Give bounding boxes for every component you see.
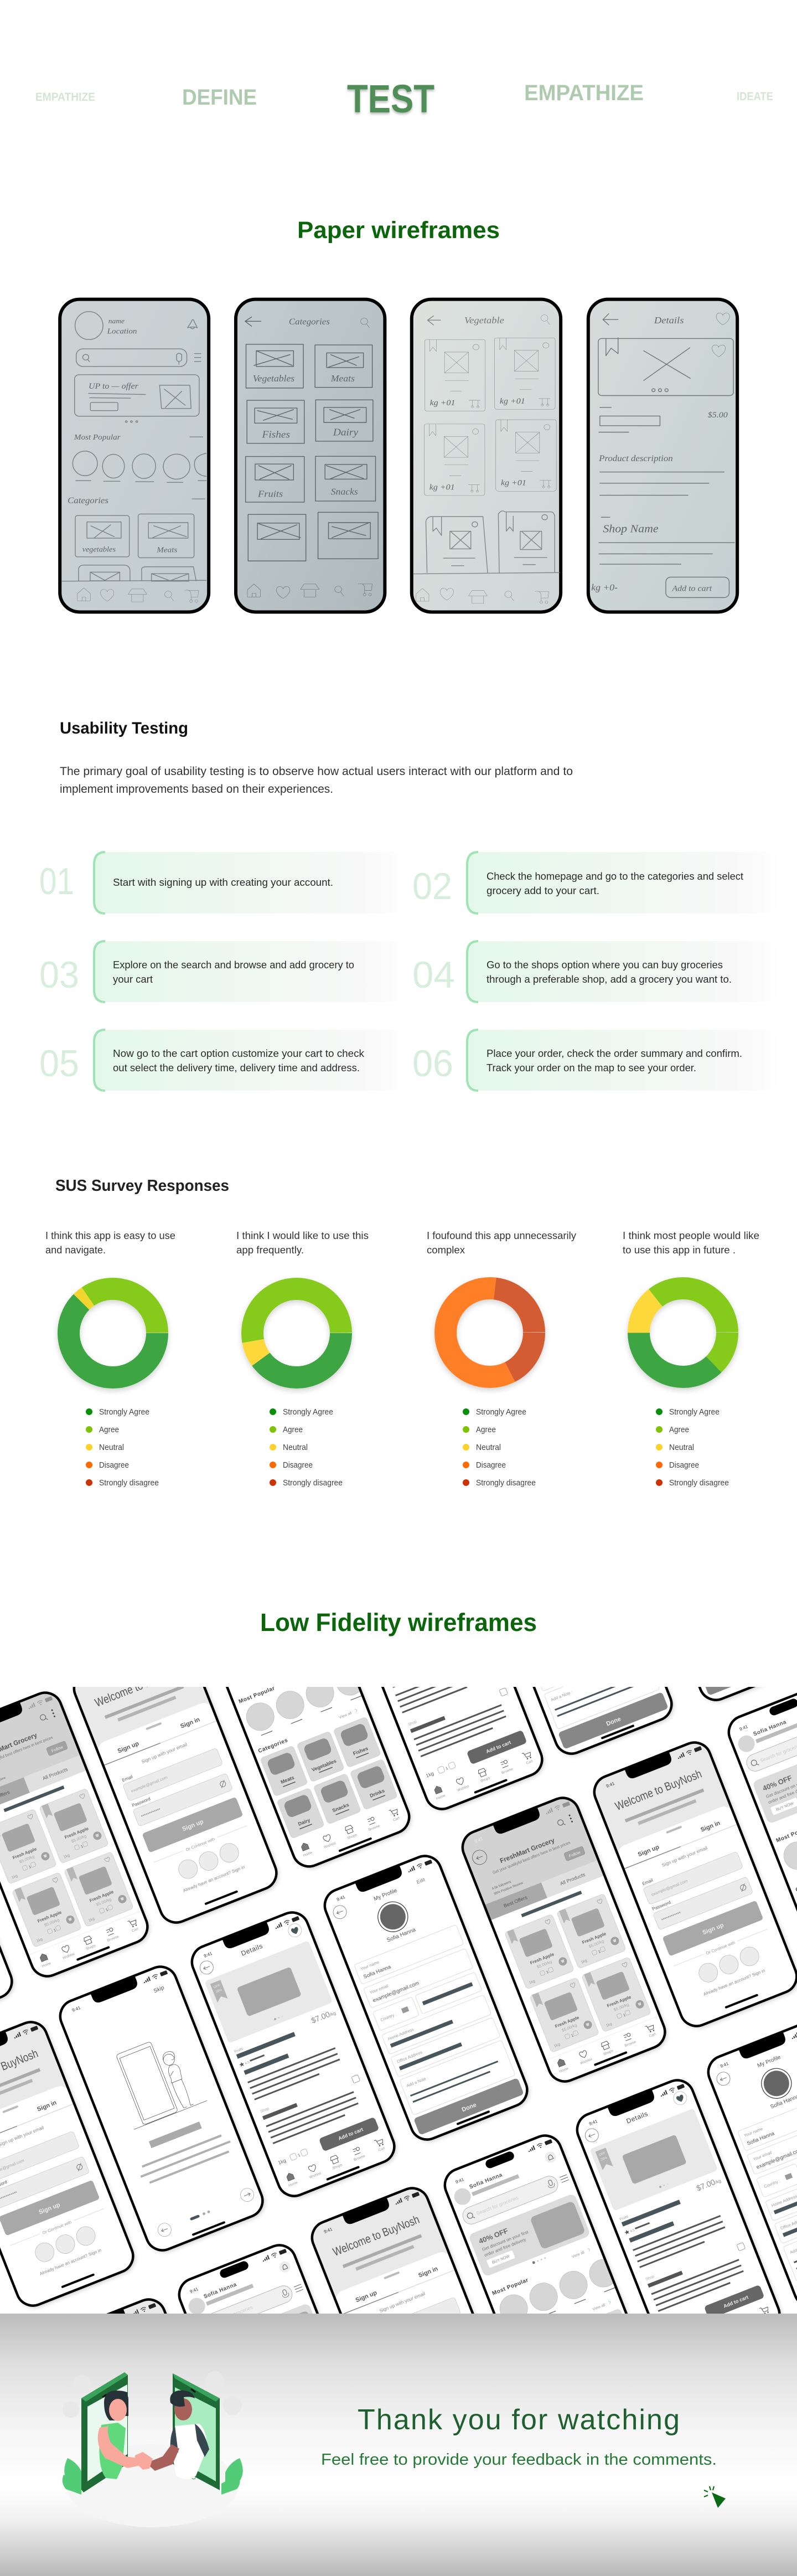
task 04: 04: [412, 954, 455, 996]
legend: Disagree: [283, 1461, 313, 1470]
woman: [98, 2391, 144, 2479]
phone: paper details sketch: Product description: [598, 454, 673, 463]
phone: paper categories sketch: Categories: [289, 317, 330, 327]
task 05: 05: [39, 1042, 79, 1085]
question text: I think I would like to use this: [236, 1230, 369, 1241]
legend: Agree: [283, 1426, 303, 1434]
donut chart: [252, 1289, 341, 1377]
legend: Strongly Agree: [283, 1408, 333, 1417]
phone: paper categories sketch: Dairy: [333, 427, 359, 438]
step: empathize small: EMPATHIZE: [35, 91, 95, 104]
task 06: [412, 1030, 780, 1091]
heading: low fidelity wireframes: Low Fidelity wireframes: [260, 1608, 537, 1637]
question text: complex: [427, 1245, 465, 1256]
question text: I foufound this app unnecessarily: [427, 1230, 576, 1241]
task 05: Now go to the cart option customize your cart to check: [113, 1048, 365, 1059]
phone: my profile form: [320, 1851, 532, 2144]
phone: paper vegetable sketch: Vegetable: [464, 315, 504, 326]
task 06: Place your order, check the order summary and confirm.: [487, 1048, 742, 1059]
phone: home bottom: [174, 2238, 408, 2573]
task 05: [39, 1030, 407, 1091]
step: test current: TEST: [347, 78, 434, 121]
phone: details middle: [187, 1908, 399, 2201]
feedback message: Feel free to provide your feedback in the comments.: [321, 2451, 717, 2469]
man: [135, 2391, 209, 2479]
phone: paper vegetable sketch: [412, 300, 561, 612]
phone: paper categories sketch: Fruits: [257, 488, 283, 499]
legend: [463, 1408, 536, 1488]
survey question 1: [45, 1230, 175, 1488]
task 02: Check the homepage and go to the categories and select: [487, 871, 743, 882]
legend: [270, 1408, 343, 1488]
survey question 3: [427, 1230, 576, 1488]
phone: onboarding illustration: [55, 1962, 267, 2255]
question text: [45, 1230, 175, 1256]
phone: form top right: [698, 1687, 764, 1704]
illustration: handshake through phones: [63, 2371, 243, 2527]
legend: Disagree: [669, 1461, 699, 1470]
phone: sign up bottom: [44, 2295, 257, 2576]
phone: home right: [727, 1693, 797, 1912]
phone: paper details sketch: [588, 300, 737, 612]
legend: Neutral: [669, 1443, 694, 1452]
phone: shop left: [0, 1688, 152, 1981]
icon: cursor click: [704, 2486, 726, 2508]
question text: I think most people would like: [623, 1230, 759, 1241]
phone: paper details sketch: Details: [654, 315, 684, 326]
paper wireframes: home and categories: [60, 300, 385, 612]
phone: paper home sketch: Categories: [68, 496, 108, 505]
heading: paper wireframes: Paper wireframes: [297, 217, 500, 244]
legend: Agree: [476, 1426, 496, 1434]
phone: paper home sketch: Most Popular: [74, 433, 121, 442]
task 04: through a preferable shop, add a grocery you want to.: [487, 974, 732, 985]
process stepper: [35, 78, 773, 121]
phone: paper home sketch: [60, 300, 209, 612]
question text: app frequently.: [236, 1245, 304, 1256]
task 02: 02: [412, 865, 452, 907]
question text: and navigate.: [45, 1245, 106, 1256]
task 03: [39, 941, 407, 1002]
phone: paper categories sketch: Meats: [330, 374, 355, 384]
task 01: 01: [39, 860, 74, 902]
phone: home lower right: [440, 2128, 674, 2463]
phone: profile form top: [532, 1687, 675, 1757]
task 06: 06: [412, 1042, 453, 1085]
legend: Disagree: [476, 1461, 506, 1470]
question text: [236, 1230, 369, 1256]
task 04: Go to the shops option where you can buy groceries: [487, 959, 723, 970]
phone: sign up: [73, 1687, 280, 1927]
step: ideate: IDEATE: [737, 90, 773, 103]
legend: Neutral: [99, 1443, 124, 1452]
footer panel: [0, 2314, 797, 2576]
task 02: grocery add to your cart.: [487, 885, 599, 896]
phone: paper details sketch: Add to cart: [671, 584, 712, 593]
legend: Strongly disagree: [476, 1479, 536, 1488]
task 03: 03: [39, 954, 79, 996]
phone: details top: [381, 1687, 546, 1813]
legend: Neutral: [476, 1443, 501, 1452]
heading: sus survey responses: SUS Survey Responses: [55, 1177, 229, 1195]
legend: Strongly disagree: [669, 1479, 729, 1488]
usability testing description: [60, 765, 573, 796]
legend: Strongly disagree: [99, 1479, 159, 1488]
phone: paper categories sketch: [236, 300, 385, 612]
phone: paper details sketch: Shop Name: [603, 522, 659, 535]
donut chart: [639, 1288, 727, 1377]
survey question 4: [623, 1230, 759, 1488]
legend: Agree: [669, 1426, 689, 1434]
usability tasks: [39, 852, 780, 1091]
usability testing description: The primary goal of usability testing is to observe how actual users interact with our platform and to: [60, 765, 573, 778]
phone: paper home sketch: name: [108, 317, 125, 325]
phone: paper home sketch: UP to — offer: [89, 382, 139, 391]
question text: to use this app in future .: [623, 1245, 736, 1256]
question text: [623, 1230, 759, 1256]
donut chart: [446, 1288, 534, 1377]
task 02: [412, 852, 780, 913]
legend: Strongly Agree: [99, 1408, 149, 1417]
phone: paper details sketch: kg +0-: [591, 582, 618, 592]
legend: Strongly Agree: [476, 1408, 526, 1417]
usability testing description: implement improvements based on their experiences.: [60, 783, 333, 796]
phone: paper home sketch: vegetables: [82, 545, 116, 553]
question text: I think this app is easy to use: [45, 1230, 175, 1241]
legend: Disagree: [99, 1461, 129, 1470]
phone: paper home sketch: Location: [107, 327, 137, 335]
task 04: [412, 941, 780, 1002]
task 03: Explore on the search and browse and add grocery to: [113, 959, 354, 970]
task 03: your cart: [113, 974, 153, 985]
phone: paper categories sketch: Fishes: [262, 429, 290, 440]
phone: freshmart shop: [458, 1793, 670, 2086]
heading: usability testing: Usability Testing: [60, 719, 188, 737]
task 06: Track your order on the map to see your order.: [487, 1062, 696, 1073]
phone: my profile right: [703, 2018, 797, 2311]
paper wireframes: vegetable and details: [412, 300, 737, 612]
low fidelity wireframe collage: [0, 1687, 797, 2314]
task 01: [39, 852, 407, 913]
phone: home categories: [226, 1687, 413, 1870]
phone: sign up lower center: [307, 2183, 520, 2480]
legend: Agree: [99, 1426, 119, 1434]
legend: Strongly disagree: [283, 1479, 343, 1488]
phone: welcome to buynosh: [589, 1738, 797, 2034]
phone: sign up far left: [0, 1940, 15, 2002]
task 05: out select the delivery time, delivery time and address.: [113, 1062, 360, 1073]
step: define: DEFINE: [182, 85, 257, 110]
phone: sign up lower left: [0, 2017, 139, 2314]
legend: Strongly Agree: [669, 1408, 720, 1417]
task 01: Start with signing up with creating your account.: [113, 877, 333, 888]
phone: paper categories sketch: Vegetables: [253, 374, 295, 384]
survey question 2: [236, 1230, 369, 1488]
phone: paper home sketch: Meats: [156, 546, 178, 555]
donut chart: [69, 1289, 157, 1377]
phone: paper details sketch: $5.00: [708, 411, 728, 420]
phone: paper categories sketch: Snacks: [331, 487, 358, 497]
phone: details lower right: [572, 2076, 784, 2368]
left phone: [81, 2372, 128, 2492]
thank you heading: Thank you for watching: [358, 2404, 680, 2436]
legend: [86, 1408, 159, 1488]
question text: [427, 1230, 576, 1256]
legend: [656, 1408, 729, 1488]
legend: Neutral: [283, 1443, 308, 1452]
step: empathize large: EMPATHIZE: [524, 81, 644, 105]
right phone: [173, 2373, 220, 2490]
